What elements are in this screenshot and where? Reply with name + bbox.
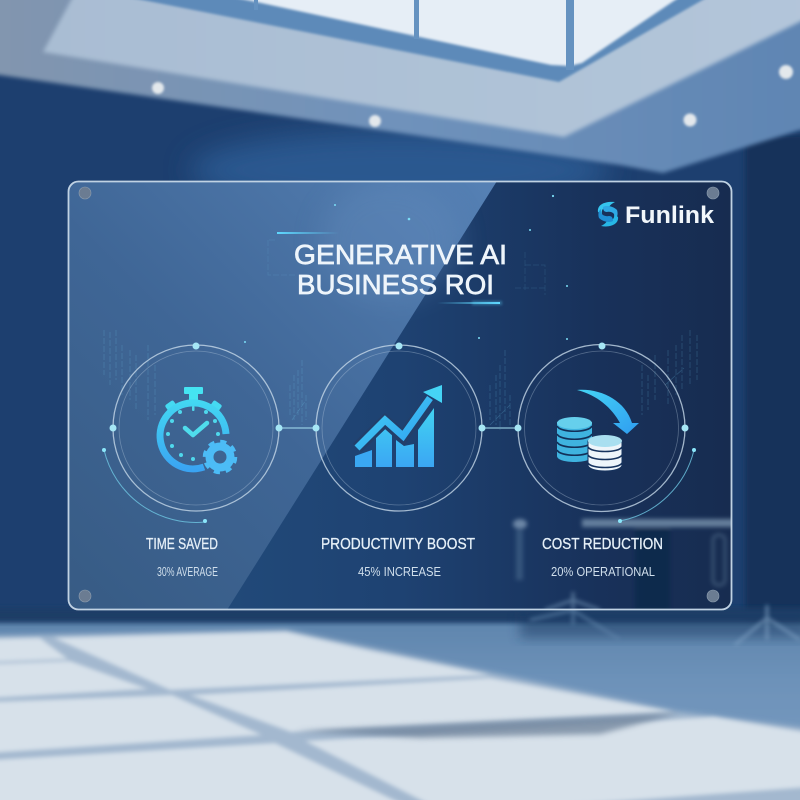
- ring: time saved: [110, 342, 282, 511]
- mounting screws: [79, 187, 719, 602]
- metric: time saved: TIME SAVED: [146, 536, 218, 553]
- metric: time saved: 30% AVERAGE: [157, 564, 218, 579]
- icon: logo swirl: [598, 202, 618, 226]
- icon: coin stacks with arrow: [557, 390, 639, 471]
- floor light tiles: [0, 632, 800, 800]
- ceiling: [0, 0, 800, 173]
- blurred desk behind glass: [513, 519, 735, 610]
- metric: cost reduction: COST REDUCTION: [542, 536, 663, 553]
- icon: stopwatch with gear: [160, 387, 235, 472]
- connector lines between rings: [279, 427, 518, 429]
- floor: [0, 621, 800, 800]
- metric: cost reduction: [542, 536, 663, 579]
- floor tile base: [0, 630, 800, 800]
- icon: rising bar chart with arrow: [355, 385, 442, 467]
- chairs behind glass: [520, 596, 800, 645]
- title: GENERATIVE AI: [294, 239, 507, 270]
- metric: productivity boost: [321, 536, 475, 579]
- metric: productivity boost: PRODUCTIVITY BOOST: [321, 536, 475, 553]
- glass panel: [68, 180, 735, 610]
- outer arc accents: [104, 450, 694, 522]
- ring: productivity boost: [312, 342, 486, 511]
- title: [294, 239, 507, 300]
- skylight frame: [92, 0, 720, 82]
- metric: time saved: [146, 536, 218, 579]
- ring: cost reduction: [514, 342, 688, 512]
- logo: Funlink: Funlink: [625, 202, 715, 229]
- metric: cost reduction: 20% OPERATIONAL: [551, 564, 655, 579]
- scattered particles: [244, 195, 568, 343]
- circuit traces decoration: [104, 240, 697, 430]
- metric: productivity boost: 45% INCREASE: [358, 564, 441, 579]
- blue coin stack: [557, 417, 592, 462]
- ceiling lights: [152, 65, 793, 127]
- skylight soffit: [43, 0, 800, 137]
- title accent lines: [277, 232, 502, 305]
- floor gap shadow: [296, 713, 680, 738]
- glass sheen: [68, 181, 497, 610]
- title: BUSINESS ROI: [297, 269, 494, 300]
- white coin stack: [588, 435, 622, 471]
- skylight panes: [200, 0, 690, 66]
